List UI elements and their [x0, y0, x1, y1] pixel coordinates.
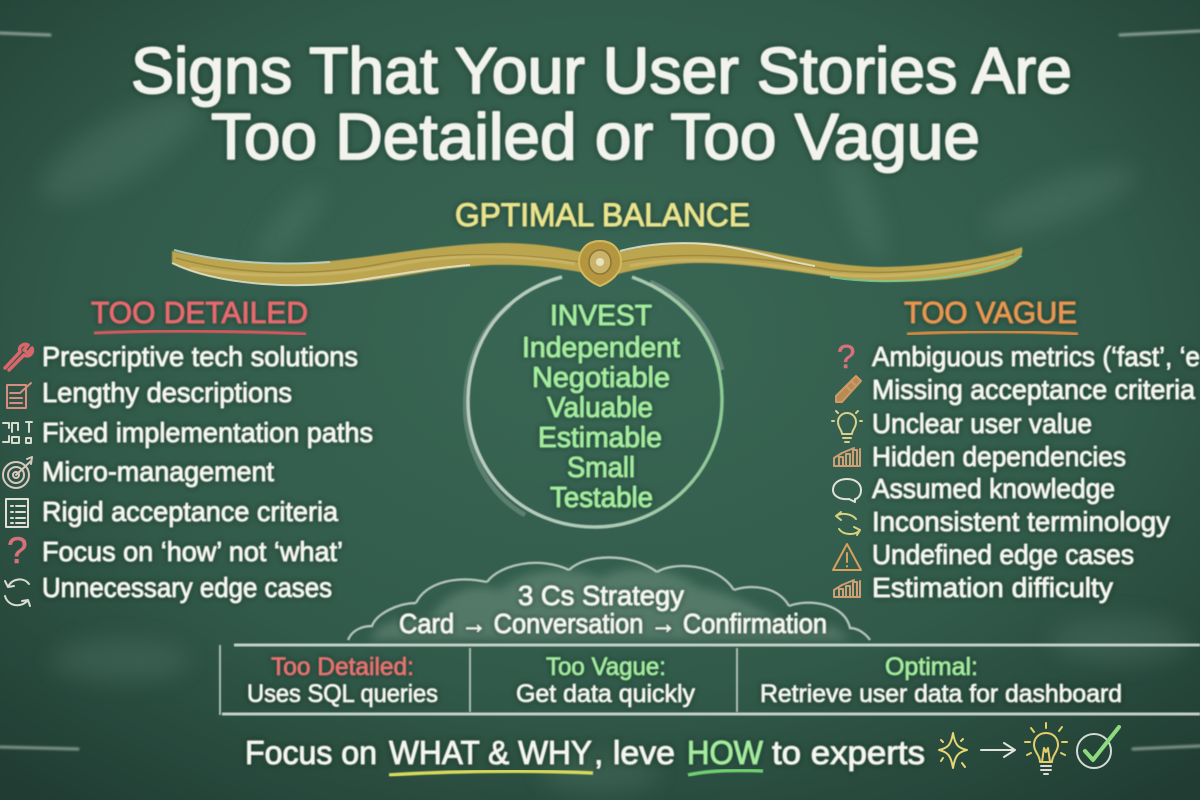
cell: too vague: Get data quickly [516, 680, 695, 708]
icon: question mark: ? [7, 530, 28, 571]
balance beam [172, 241, 1022, 286]
icon: sparkle [939, 733, 967, 768]
icon: check circle [1077, 727, 1119, 768]
title: Too Detailed or Too Vague [211, 100, 980, 173]
beam hub [579, 241, 621, 286]
cell: too detailed: Uses SQL queries [247, 680, 438, 708]
list: too vague items [872, 341, 1200, 603]
icon: target [3, 457, 32, 488]
icon: swap arrows [836, 512, 860, 535]
title: Signs That Your User Stories Are [131, 34, 1072, 107]
icon: speech bubble [833, 479, 861, 502]
icon: document with pencil [7, 383, 31, 408]
list: too vague items: Assumed knowledge [872, 473, 1115, 504]
icon: bar chart small [834, 580, 860, 597]
cell: optimal: Optimal: [885, 653, 978, 681]
icon: checklist [6, 499, 28, 527]
cloud: 3 Cs strategy: 3 Cs Strategy [518, 580, 684, 611]
list: too detailed items: Micro-management [42, 456, 274, 487]
panel: INVEST: Independent [522, 332, 680, 364]
footer message: HOW [687, 734, 764, 771]
panel: INVEST: Testable [550, 482, 653, 514]
list: too detailed items: Focus on ‘how’ not ‘what’ [42, 536, 343, 567]
icon: question mark: ? [837, 338, 855, 375]
list: too detailed items: Rigid acceptance criteria [42, 496, 338, 527]
panel: INVEST: INVEST [550, 300, 652, 332]
cell: optimal [760, 653, 1122, 708]
list: too vague items: Undefined edge cases [872, 539, 1134, 570]
icon: lightbulb [832, 411, 862, 442]
icon: fixed paths [3, 422, 32, 443]
footer message: Focus on [245, 734, 377, 771]
heading: optimal balance: GPTIMAL BALANCE [455, 197, 750, 233]
title [131, 34, 1072, 173]
panel: INVEST: Estimable [538, 422, 662, 454]
table: examples [220, 645, 1200, 715]
panel: too detailed [3, 295, 373, 606]
icon: warning triangle [833, 544, 861, 570]
icon: lightbulb [1025, 723, 1067, 774]
list: too detailed items: Fixed implementation paths [42, 417, 373, 448]
list: too detailed items [42, 341, 373, 603]
panel: INVEST: Negotiable [532, 362, 670, 394]
panel: INVEST: Valuable [547, 392, 653, 424]
footer message: , leve [594, 734, 675, 771]
cell: too detailed [247, 653, 438, 708]
icon: ruler [836, 376, 861, 402]
list: too detailed items: Lengthy descriptions [42, 377, 292, 408]
cloud: 3 Cs strategy [348, 558, 870, 640]
cloud: 3 Cs strategy: Card → Conversation → Confirmation [399, 608, 827, 639]
list: too vague items: Inconsistent terminology [872, 506, 1170, 537]
list: too detailed items: Unnecessary edge cases [42, 572, 332, 603]
heading: too vague: TOO VAGUE [904, 295, 1077, 330]
list: too vague items: Hidden dependencies [872, 441, 1126, 472]
heading: too detailed: TOO DETAILED [91, 295, 308, 330]
panel: INVEST [522, 300, 680, 514]
list: too vague items: Estimation difficulty [872, 572, 1113, 603]
icon: bar chart [834, 448, 860, 466]
footer message: WHAT & WHY [389, 734, 592, 771]
list: too detailed items: Prescriptive tech solutions [42, 341, 358, 372]
icon: cycle arrows [5, 579, 30, 606]
footer message: to experts [772, 734, 925, 771]
list: too vague items: Unclear user value [872, 408, 1092, 439]
cell: too vague: Too Vague: [546, 653, 666, 681]
icon: wrench [5, 344, 32, 370]
panel: too vague [832, 295, 1200, 603]
footer message [245, 723, 1119, 775]
list: too vague items: Missing acceptance criteria [872, 374, 1195, 405]
cell: too vague [516, 653, 695, 708]
arrow [981, 743, 1015, 757]
cell: too detailed: Too Detailed: [271, 653, 414, 681]
circle: INVEST ring [465, 277, 722, 527]
cell: optimal: Retrieve user data for dashboard [760, 680, 1122, 708]
panel: INVEST: Small [567, 452, 635, 484]
